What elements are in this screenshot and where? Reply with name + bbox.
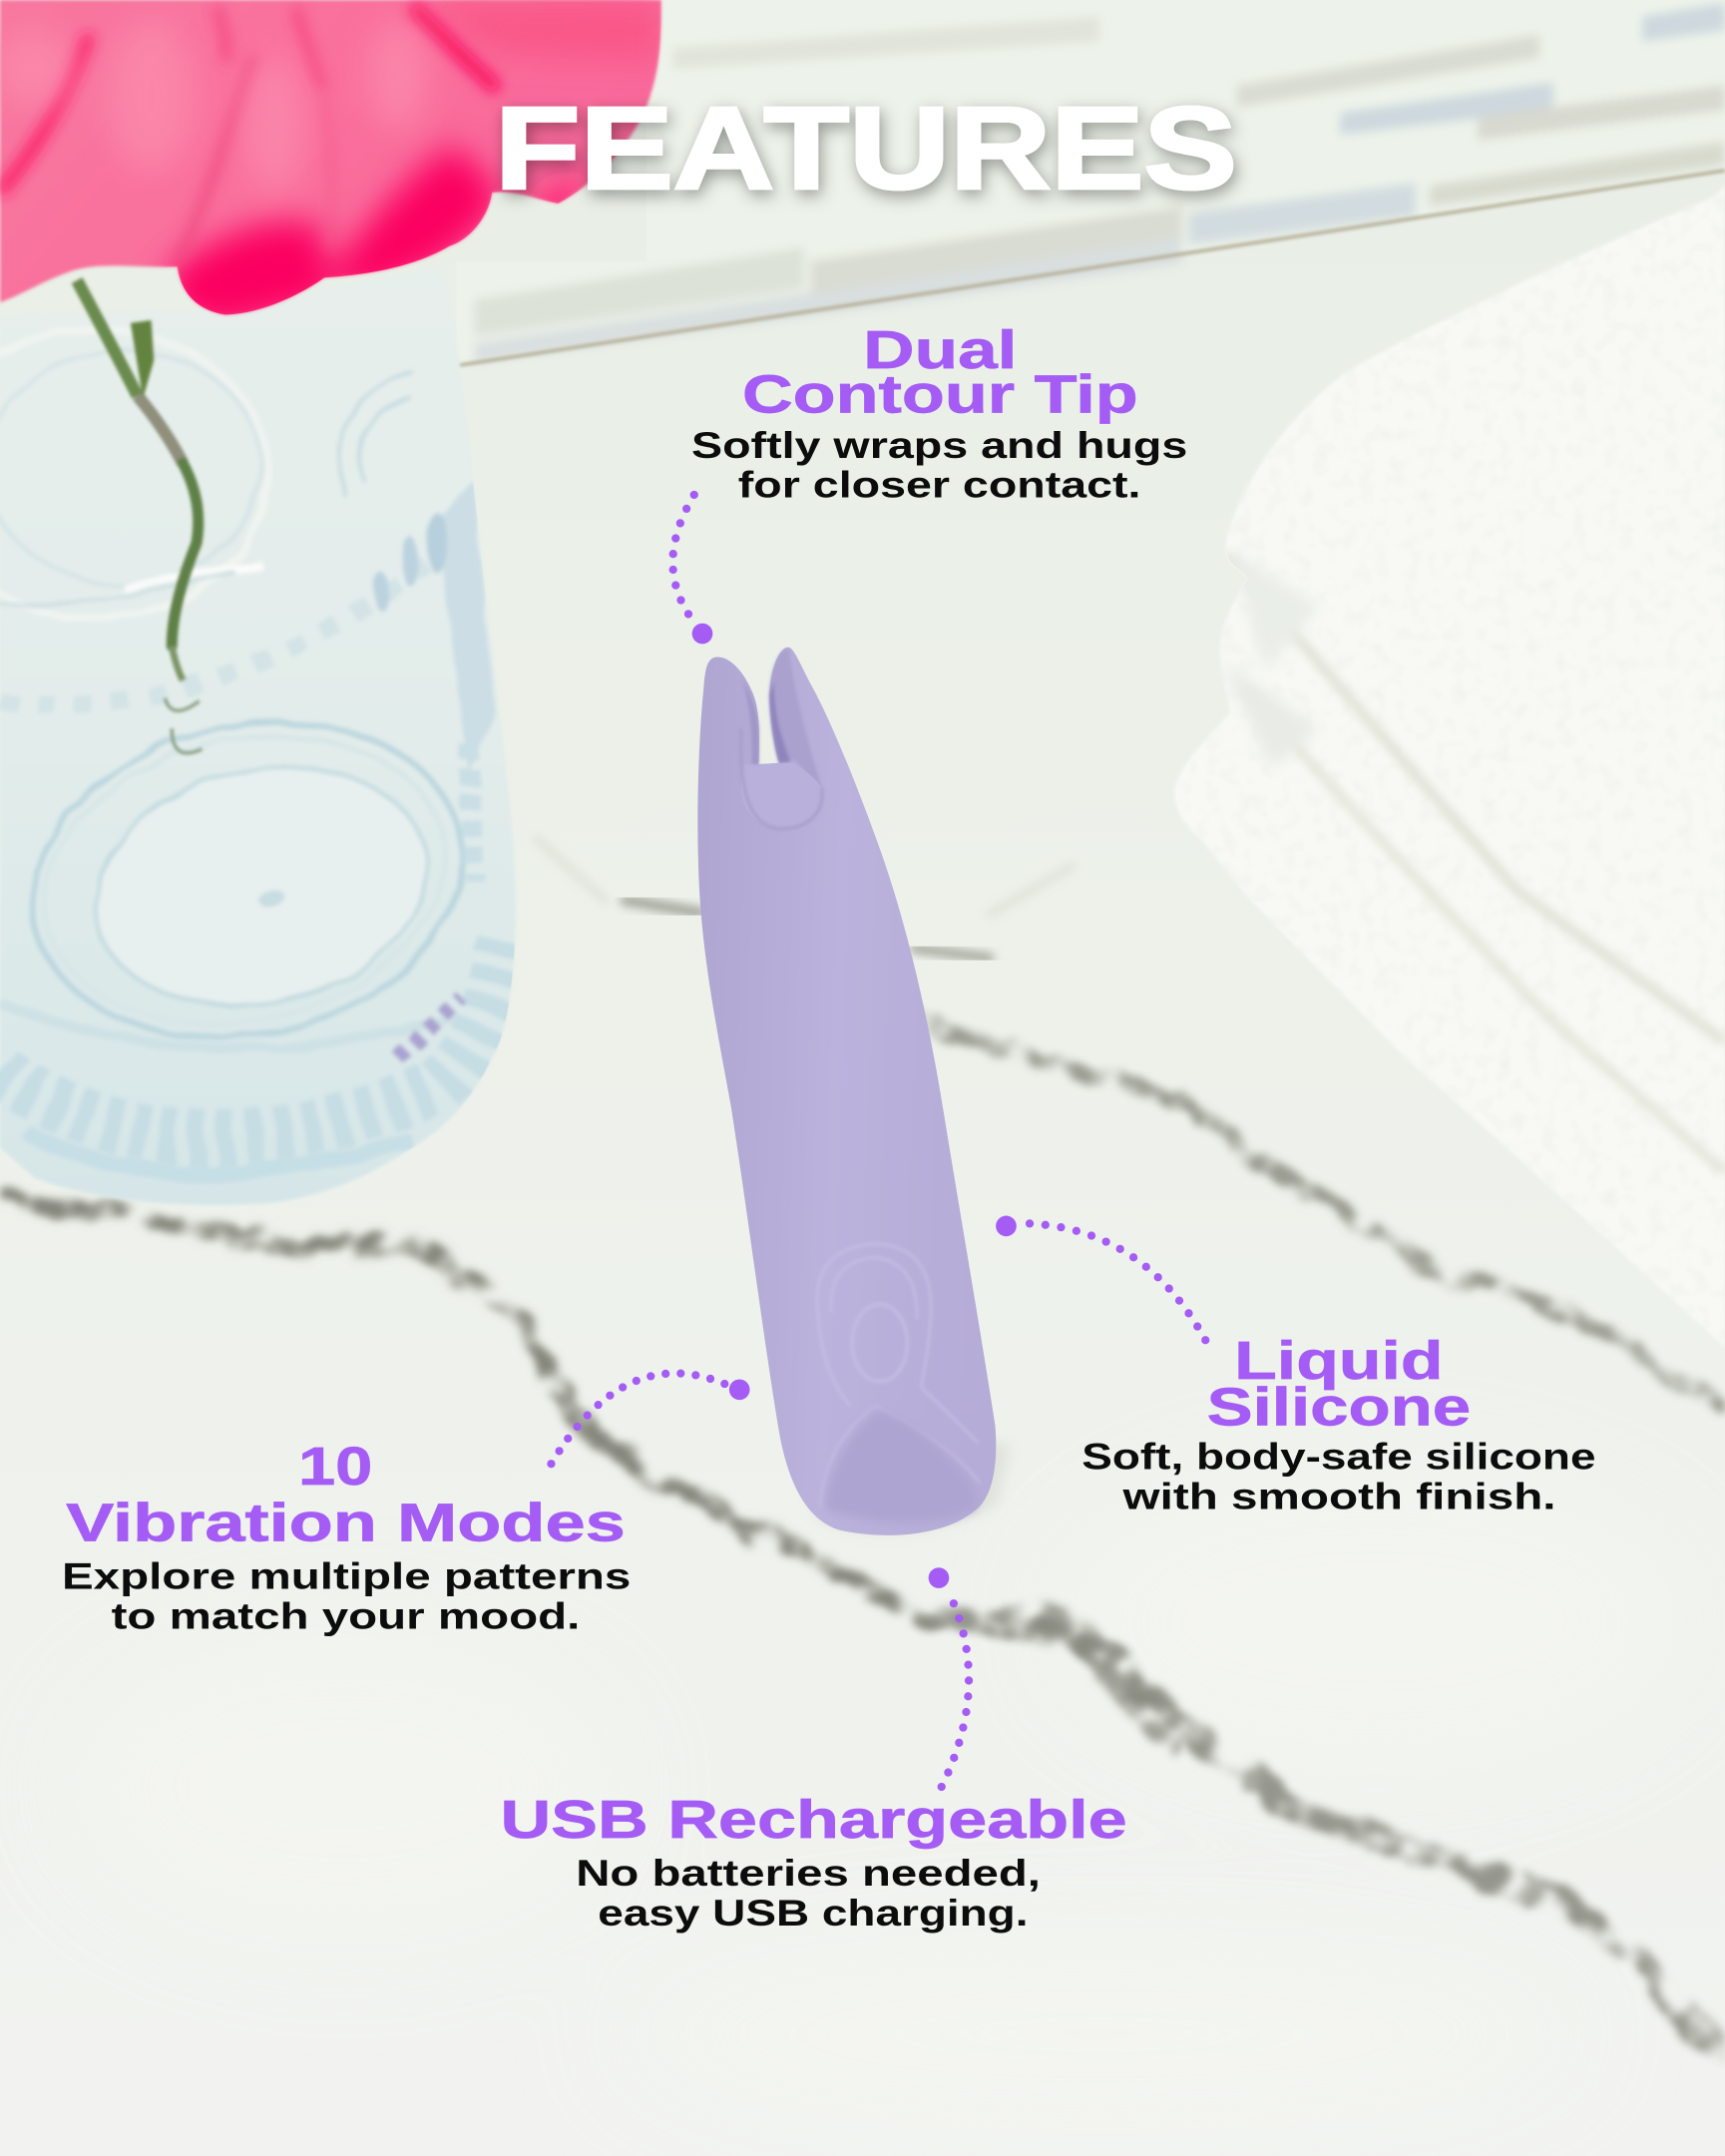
callout: dual contour tip: for closer contact. — [738, 464, 1140, 506]
callout: 10 vibration modes: 10 — [298, 1437, 372, 1497]
product: lavender massager — [697, 647, 996, 1535]
callout: liquid silicone: Soft, body-safe silicone — [1081, 1436, 1595, 1478]
arrow: usb rechargeable pointer — [929, 1567, 969, 1787]
end cap — [825, 1410, 977, 1522]
arrow: vibration modes pointer — [551, 1373, 750, 1464]
callout: dual contour tip: Dual — [863, 320, 1017, 380]
callout: liquid silicone: with smooth finish. — [1121, 1476, 1556, 1517]
callout: 10 vibration modes: Vibration Modes — [66, 1493, 626, 1552]
callout: liquid silicone — [1081, 1331, 1595, 1517]
glass vase — [0, 268, 516, 1205]
callout: dual contour tip — [691, 320, 1187, 506]
arrow: liquid silicone pointer — [996, 1216, 1205, 1340]
callout: 10 vibration modes — [62, 1437, 631, 1637]
callout: dual contour tip: Softly wraps and hugs — [691, 424, 1187, 466]
pink flower petals — [0, 0, 661, 330]
tip notch — [740, 648, 822, 829]
marble highlights — [69, 1471, 1691, 2130]
flower stem — [77, 280, 203, 753]
grip ridges — [817, 1244, 980, 1508]
wall tiles — [456, 0, 1725, 365]
callout: usb rechargeable: USB Rechargeable — [500, 1790, 1127, 1850]
callout: usb rechargeable: easy USB charging. — [598, 1892, 1029, 1934]
callout: dual contour tip: Contour Tip — [742, 364, 1138, 424]
product shadow — [811, 1444, 1011, 1533]
arrow: dual contour tip pointer — [672, 495, 712, 644]
callout: usb rechargeable — [500, 1790, 1127, 1934]
page title: FEATURES — [495, 83, 1237, 214]
glass embossing — [0, 330, 506, 1173]
callout: liquid silicone: Liquid — [1234, 1331, 1444, 1391]
folded white towels — [1168, 179, 1725, 1361]
callout: 10 vibration modes: Explore multiple patterns — [62, 1555, 631, 1597]
callout: liquid silicone: Silicone — [1207, 1378, 1471, 1438]
marble veins — [0, 838, 1725, 2048]
callout: usb rechargeable: No batteries needed, — [576, 1852, 1041, 1894]
callout: 10 vibration modes: to match your mood. — [112, 1595, 580, 1637]
